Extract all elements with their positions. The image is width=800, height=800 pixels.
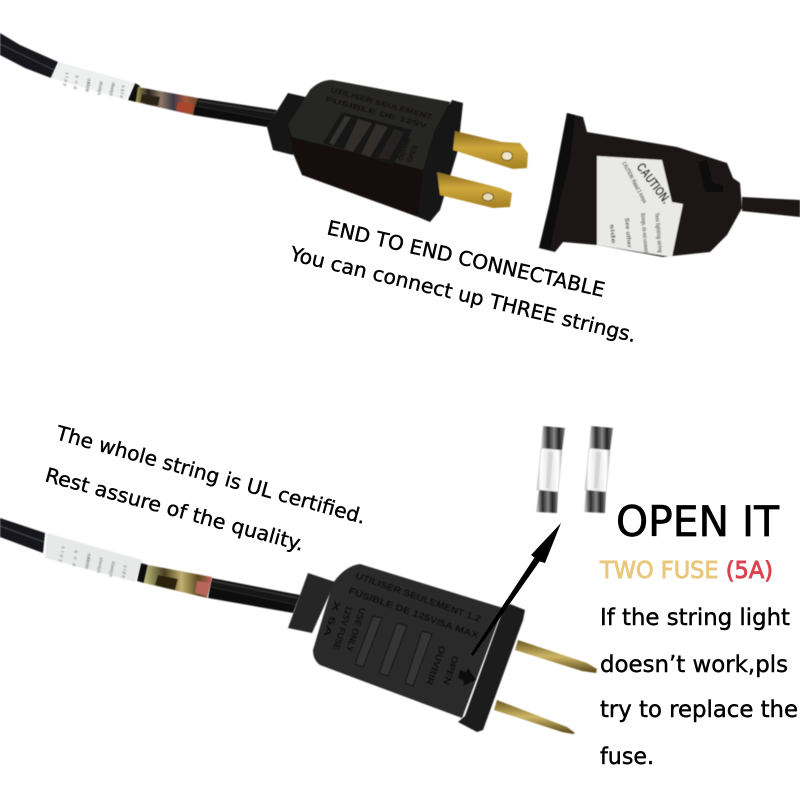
caution label: CAUTION: Rated 3 Amps [620, 161, 647, 205]
cord label: safe [118, 85, 126, 99]
socket cord [742, 197, 800, 217]
moulded lettering: FUSIBLE DE 125V [324, 96, 428, 130]
holographic band [136, 87, 198, 115]
cord label: outdoors [84, 78, 92, 93]
caution label: Test lighting string [653, 213, 662, 253]
upper brass blade [453, 131, 528, 169]
strain relief [267, 93, 310, 155]
caution label: Strings, do not connect [639, 213, 648, 253]
moulded lettering: UTILISER SEULEMENT 1.2 [354, 570, 482, 624]
grip ribs [355, 616, 432, 686]
icon: fuse right [584, 426, 613, 513]
text block: replacement advice: doesn’t work,pls [600, 652, 788, 678]
plug body top face [288, 80, 450, 170]
cord label: stay [62, 72, 70, 87]
caption: connect up three strings: You can connect up THREE strings. [287, 241, 639, 347]
cord label: Always [107, 561, 116, 578]
plug body side [288, 80, 450, 217]
front plate [458, 604, 525, 732]
moulded lettering: OPEN [441, 654, 461, 686]
plug body [313, 564, 503, 718]
cord label: stay [57, 546, 66, 563]
twin cords [193, 98, 277, 127]
cord label: and [72, 75, 80, 90]
moulded lettering: 125V FUSE [331, 604, 355, 651]
cord label [51, 62, 135, 100]
moulded lettering: OPEN [406, 144, 420, 164]
cord: top left [0, 33, 58, 78]
caption: quality: Rest assure of the quality. [43, 463, 307, 556]
moulded lettering [321, 570, 482, 687]
strain relief [288, 573, 335, 633]
text block: replacement advice [600, 605, 798, 770]
moulded lettering: FUSIBLE DE 125V/5A MAX [347, 585, 480, 641]
arrow: plug to fuses [471, 523, 561, 656]
dark collar [128, 83, 140, 102]
caution label: side [608, 224, 616, 245]
dark band [137, 563, 148, 583]
caption: end to end connectable: END TO END CONNECTABLE [325, 215, 607, 302]
photo: top plug with cord [0, 33, 528, 222]
text block: replacement advice: fuse. [600, 744, 654, 770]
holographic band [144, 565, 212, 598]
moulded lettering: USE ONLY [344, 606, 368, 653]
socket clip [698, 160, 723, 192]
cord label: outdoors [83, 553, 92, 570]
cord label: always [95, 557, 104, 574]
cord: bottom left [0, 518, 45, 553]
photo: socket with caution label [539, 113, 800, 257]
cord label [45, 533, 142, 582]
photo: bottom plug with cord [0, 518, 597, 734]
moulded lettering: OUVRIR [424, 644, 448, 687]
moulded lettering [324, 87, 434, 164]
text block: replacement advice: If the string light [600, 605, 790, 631]
caution label: CAUTION. [634, 160, 674, 206]
subheading: two fuse 5A: TWO FUSE (5A) [599, 558, 773, 584]
icon: fuse left [536, 426, 565, 513]
heading: open it: OPEN IT [616, 497, 779, 546]
cord label: side [120, 565, 128, 579]
socket front face [539, 113, 575, 250]
cord label: always [96, 81, 104, 96]
lower pin [494, 700, 575, 734]
moulded lettering: UTILISER SEULEMENT [329, 87, 434, 121]
moulded lettering: X 5A [321, 599, 343, 640]
caution label: See other [623, 218, 632, 249]
text block: replacement advice: try to replace the [600, 697, 798, 723]
cord label: and [70, 550, 79, 567]
grip ribs [323, 112, 412, 165]
upper pin [515, 640, 597, 673]
socket body [539, 113, 742, 257]
caution label [597, 156, 683, 257]
lower brass blade [437, 172, 512, 208]
twin cords [208, 578, 300, 613]
front plate [418, 100, 463, 222]
moulded lettering: OUVRIR [397, 137, 413, 162]
cord label: Always [108, 82, 116, 97]
caption: UL certified: The whole string is UL certified. [53, 420, 369, 529]
